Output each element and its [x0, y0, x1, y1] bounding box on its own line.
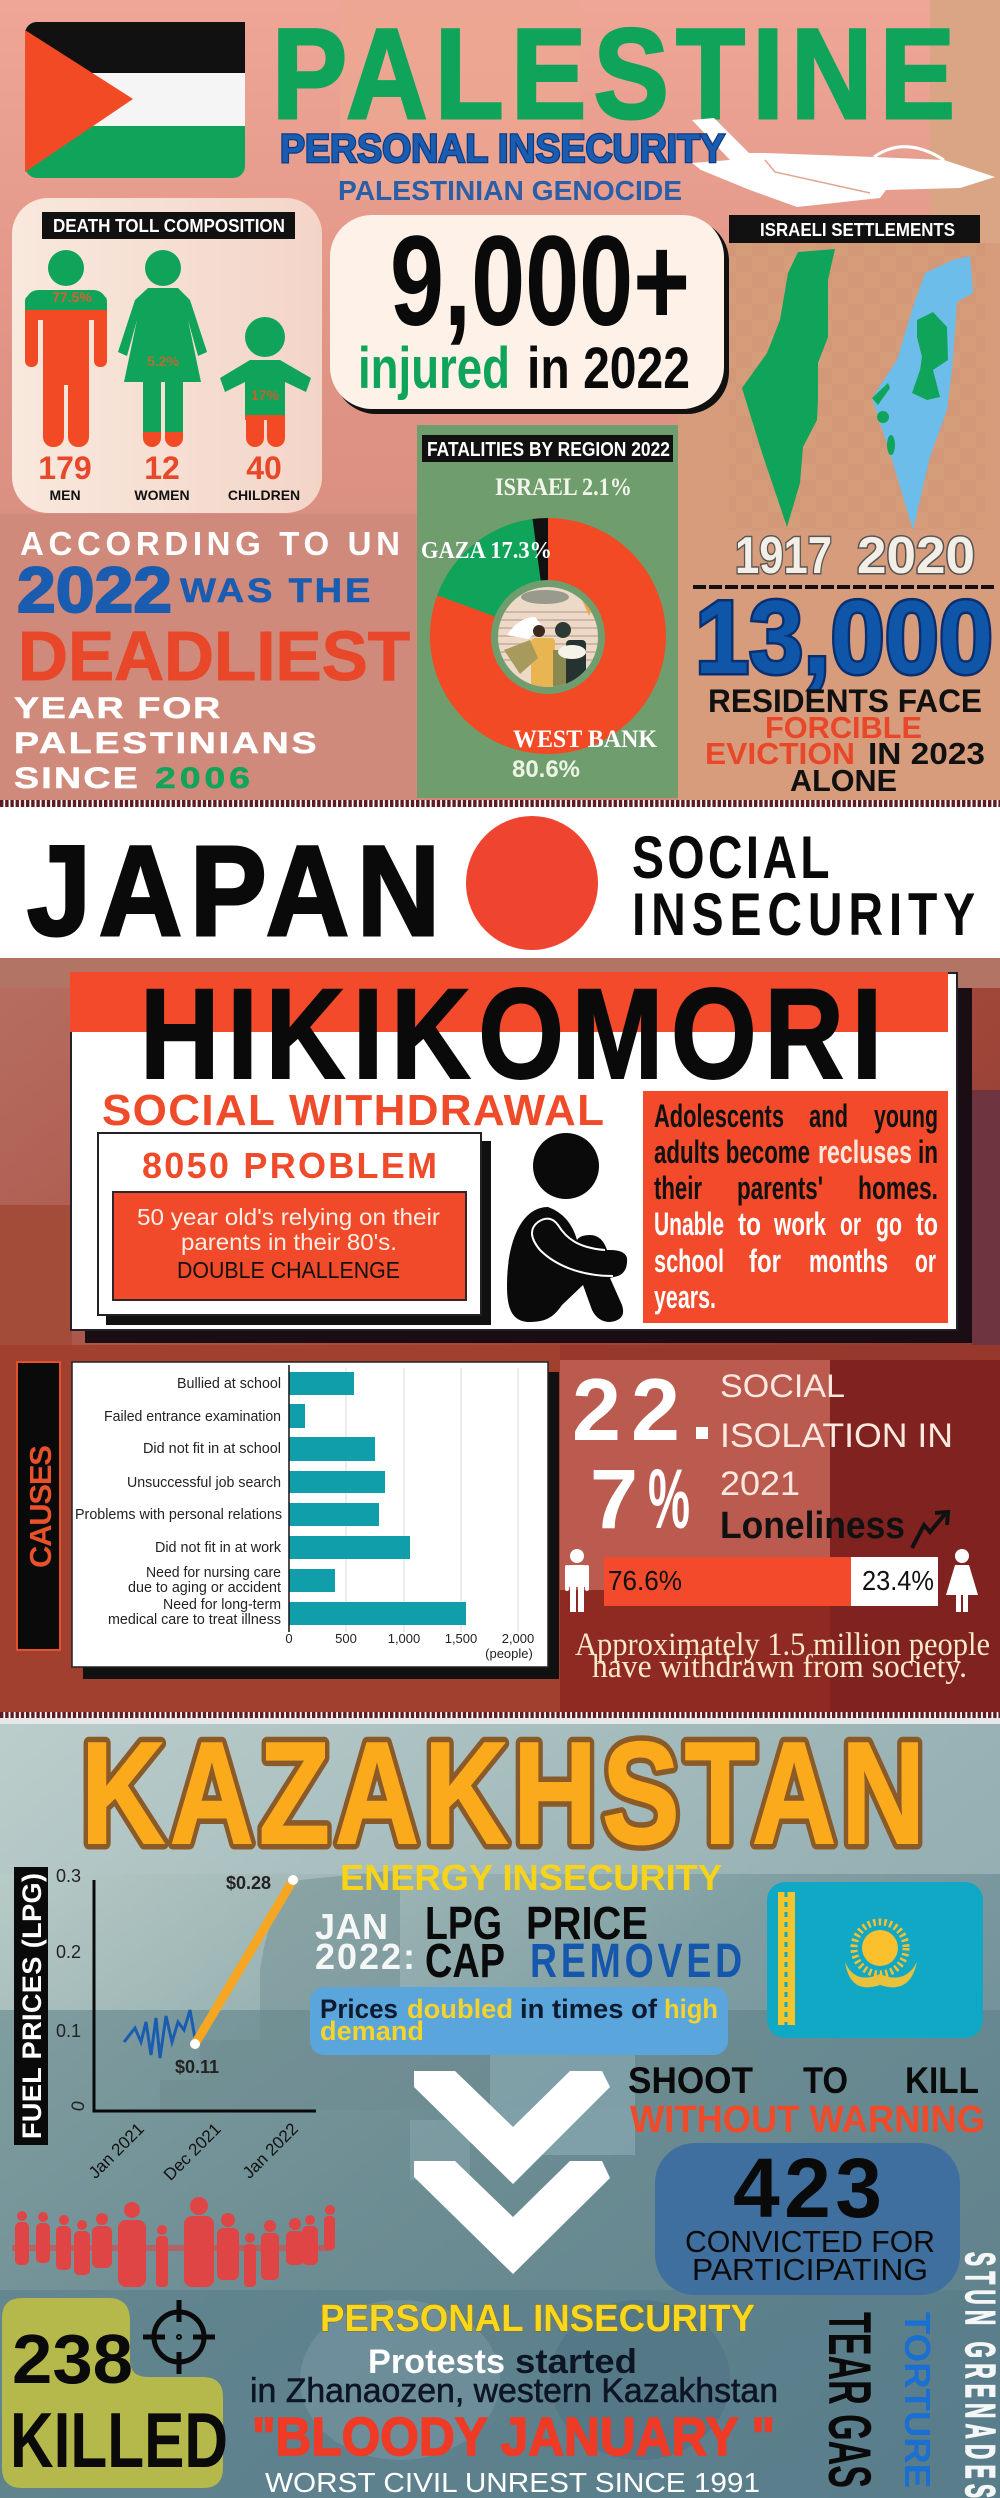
- label: years: 1917: [735, 527, 832, 585]
- bar chart: causes: Unsuccessful job search: [127, 1474, 281, 1491]
- text block: deadliest year: DEADLIEST: [18, 617, 410, 695]
- stat: 13,000 residents: RESIDENTS FACE: [708, 683, 982, 719]
- text block: personal insecurity: started: [515, 2343, 637, 2381]
- stat: social isolation: 22: [572, 1360, 680, 1459]
- text block: description: months: [809, 1243, 888, 1279]
- bar chart: causes: Did not fit in at work: [155, 1539, 281, 1556]
- text block: description: years.: [654, 1279, 716, 1315]
- label: fuel prices: FUEL PRICES (LPG): [17, 1873, 47, 2139]
- panel: 8050 problem: 8050 PROBLEM: [142, 1145, 437, 1186]
- icon: fighter jet: [692, 118, 995, 207]
- heading: social withdrawal: SOCIAL WITHDRAWAL: [102, 1086, 604, 1135]
- bar chart: causes: 0: [285, 1631, 293, 1646]
- text block: description: homes.: [858, 1170, 938, 1206]
- section: Palestine: [0, 0, 1000, 802]
- panel: fatalities by region: [417, 425, 678, 798]
- text block: description: [643, 1091, 948, 1323]
- text block: description: Adolescents: [654, 1098, 784, 1134]
- panel: 8050 problem: 50 year old's relying on their: [137, 1204, 440, 1230]
- text block: personal insecurity: Protests: [368, 2343, 505, 2381]
- title: Kazakhstan: KAZAKHSTAN: [81, 1712, 925, 1874]
- callout: prices doubled: demand: [320, 2016, 424, 2046]
- bar chart: causes: due to aging or accident: [128, 1579, 282, 1596]
- panel: fatalities by region: GAZA 17.3%: [421, 538, 552, 564]
- text block: description: recluses: [818, 1134, 912, 1170]
- callout: prices doubled: [310, 1987, 728, 2055]
- text block: description: for: [749, 1243, 781, 1279]
- caption: 1.5 million people: have withdrawn from society.: [592, 1649, 967, 1685]
- stat: 238 killed: 238: [12, 2320, 133, 2398]
- stat: 13,000 residents: ALONE: [790, 763, 897, 798]
- map: 1917: [742, 249, 835, 527]
- gender bar: [604, 1557, 938, 1606]
- text: shoot to kill: KILL: [905, 2060, 979, 2101]
- panel: death toll composition: [12, 198, 322, 513]
- bar chart: causes: [72, 1362, 559, 1679]
- callout: prices doubled: doubled: [407, 1994, 513, 2024]
- map: 2020: [872, 256, 973, 530]
- label: fatalities heading: FATALITIES BY REGION 2022: [427, 439, 670, 461]
- text block: personal insecurity: in Zhanaozen, western Kazakhstan: [250, 2372, 778, 2410]
- text block: LPG price cap removed: [315, 1897, 742, 1988]
- label: years: 2020: [857, 527, 975, 585]
- heading: energy insecurity: ENERGY INSECURITY: [340, 1857, 722, 1898]
- bar chart: causes: 1,500: [445, 1631, 477, 1646]
- flag: Kazakhstan: [767, 1882, 983, 2038]
- text block: LPG price cap removed: 2022:: [315, 1936, 415, 1977]
- section: Japan banner: [0, 807, 1000, 962]
- bar chart: causes: medical care to treat illness: [108, 1611, 281, 1628]
- stat: 238 killed: KILLED: [10, 2396, 228, 2484]
- stat: 13,000 residents: FORCIBLE: [765, 710, 922, 745]
- bar chart: causes: Need for long-term: [163, 1596, 281, 1613]
- panel: Hikikomori card: [70, 963, 972, 1343]
- stat: men: MEN: [49, 487, 81, 503]
- text block: description: their: [654, 1170, 702, 1206]
- label: causes: CAUSES: [23, 1445, 58, 1568]
- stat: 423 convicted: [655, 2141, 960, 2295]
- icon: child: 17%: [251, 387, 280, 403]
- icon: double chevron arrows: [414, 2071, 610, 2274]
- panel: fatalities by region: WEST BANK: [513, 726, 658, 753]
- text: shoot to kill: WITHOUT WARNING: [630, 2099, 985, 2141]
- section: Kazakhstan: [0, 1712, 1000, 2498]
- label: years: [735, 527, 975, 585]
- stat: social isolation: 7: [590, 1452, 638, 1546]
- icon: rising arrow: [912, 1512, 948, 1548]
- text block: deadliest year: PALESTINIANS: [14, 726, 316, 760]
- vertical text: torture: TORTURE: [897, 2312, 938, 2488]
- text block: description: school: [654, 1243, 724, 1279]
- panel: fatalities by region: 80.6%: [512, 756, 580, 783]
- bar chart: causes: 2,000: [502, 1631, 534, 1646]
- stat: men: [38, 450, 92, 503]
- line chart: fuel prices: Jan 2022: [239, 2119, 302, 2182]
- stat: children: CHILDREN: [228, 487, 300, 503]
- stat: social isolation: ISOLATION IN: [720, 1417, 953, 1455]
- text block: description: work: [773, 1206, 826, 1242]
- text block: LPG price cap removed: REMOVED: [530, 1935, 742, 1988]
- icon: crosshair: [143, 2300, 215, 2374]
- text block: description: and: [809, 1098, 848, 1134]
- stat: 13,000 residents: EVICTION: [705, 736, 855, 771]
- text block: description: or: [840, 1206, 861, 1242]
- stat: children: [228, 450, 300, 503]
- panel: fatalities by region: ISRAEL 2.1%: [495, 474, 632, 501]
- text: shoot to kill: [628, 2060, 985, 2141]
- line chart: fuel prices: $0.28: [226, 1873, 271, 1893]
- callout: prices doubled: in times of: [520, 1994, 658, 2024]
- caption: 1.5 million people: [575, 1627, 990, 1685]
- stat: men: 179: [38, 450, 92, 486]
- line chart: fuel prices: Dec 2021: [160, 2119, 225, 2184]
- text block: LPG price cap removed: JAN: [315, 1906, 388, 1947]
- stat: women: [134, 450, 190, 503]
- stat: women: 12: [144, 450, 180, 486]
- text block: description: in: [918, 1134, 938, 1170]
- text: shoot to kill: SHOOT: [628, 2060, 753, 2101]
- title: Kazakhstan: KAZAKHSTAN: [81, 1712, 925, 1874]
- stat: social isolation: 2021: [720, 1465, 800, 1503]
- text block: description: go: [876, 1206, 902, 1242]
- text block: deadliest year: ACCORDING TO UN: [20, 525, 400, 562]
- stat: 13,000 residents: [695, 580, 993, 798]
- icon: crowd silhouette: [12, 2197, 335, 2287]
- text block: deadliest year: WAS THE: [180, 571, 370, 610]
- subtitle: social insecurity: [632, 824, 975, 948]
- subtitle: social insecurity: INSECURITY: [632, 881, 975, 948]
- text block: deadliest year: 2022: [17, 554, 172, 626]
- bar chart: causes: 1,000: [388, 1631, 420, 1646]
- stat: 423 convicted: 423: [733, 2141, 882, 2235]
- stat: children: 40: [246, 450, 282, 486]
- text block: description: or: [915, 1243, 936, 1279]
- stat: women: WOMEN: [134, 487, 190, 503]
- panel: 8050 problem: parents in their 80's.: [181, 1229, 397, 1255]
- text block: personal insecurity: "BLOODY JANUARY ": [252, 2407, 775, 2467]
- bar chart: causes: 500: [335, 1631, 357, 1646]
- text block: LPG price cap removed: LPG: [425, 1897, 502, 1949]
- text block: deadliest year: SINCE: [14, 761, 138, 795]
- panel: 8050 problem: DOUBLE CHALLENGE: [177, 1257, 400, 1283]
- label: settlements heading: ISRAELI SETTLEMENTS: [760, 220, 955, 240]
- subtitle: social insecurity: SOCIAL: [632, 824, 830, 891]
- subtitle: personal insecurity: PERSONAL INSECURITY: [280, 127, 725, 171]
- gender bar: 76.6%: [608, 1565, 682, 1596]
- text block: description: young: [874, 1098, 938, 1134]
- stat: social isolation: SOCIAL: [720, 1368, 845, 1404]
- stat: 238 killed: [2, 2298, 228, 2488]
- bar chart: causes: Did not fit in at school: [143, 1440, 281, 1457]
- icon: man: [25, 250, 107, 447]
- title: Palestine: PALESTINE: [272, 2, 955, 146]
- line chart: fuel prices: 0.3: [56, 1866, 81, 1886]
- label: death toll heading: DEATH TOLL COMPOSITION: [53, 216, 285, 236]
- text block: description: to: [916, 1206, 938, 1242]
- text block: personal insecurity: PERSONAL INSECURITY: [320, 2298, 755, 2340]
- bar chart: causes: Need for nursing care: [146, 1564, 281, 1581]
- callout: injured: injured: [358, 336, 510, 401]
- stat: social isolation: [572, 1360, 953, 1547]
- icon: man: 77.5%: [52, 289, 92, 305]
- bar chart: causes: Problems with personal relations: [75, 1506, 282, 1523]
- bar chart: causes: Bullied at school: [177, 1375, 281, 1392]
- text block: personal insecurity: WORST CIVIL UNREST SINCE 1991: [265, 2467, 760, 2498]
- stat: social isolation: %: [648, 1452, 690, 1546]
- stat: 423 convicted: PARTICIPATING: [692, 2252, 928, 2287]
- text block: deadliest year: 2006: [155, 761, 250, 795]
- callout: prices doubled: high: [664, 1994, 718, 2024]
- gender bar: 23.4%: [862, 1565, 934, 1596]
- line chart: fuel prices: Jan 2021: [85, 2119, 148, 2182]
- heading: Hikikomori: HIKIKOMORI: [140, 963, 882, 1106]
- line chart: fuel prices: [14, 1866, 316, 2184]
- flag: Palestine: [25, 22, 245, 178]
- bar chart: causes: (people): [485, 1646, 533, 1661]
- icon: woman: 5.2%: [147, 353, 180, 369]
- callout: injured: 9,000+: [390, 210, 690, 353]
- icon: rising sun: [466, 816, 598, 950]
- icon: seated person: [507, 1133, 627, 1322]
- callout: prices doubled: Prices: [320, 1994, 398, 2024]
- text: shoot to kill: TO: [803, 2060, 848, 2101]
- text block: description: parents': [737, 1170, 823, 1206]
- stat: social isolation: Loneliness: [720, 1505, 905, 1547]
- icon: child: [220, 317, 311, 447]
- bar chart: causes: Failed entrance examination: [104, 1408, 281, 1425]
- text block: description: adults become: [654, 1134, 810, 1170]
- donut chart: [430, 518, 666, 754]
- subtitle: Palestinian genocide: PALESTINIAN GENOCIDE: [338, 175, 682, 206]
- callout: injured: [330, 210, 729, 414]
- label: causes: [17, 1362, 60, 1650]
- title: Japan: JAPAN: [27, 819, 440, 962]
- text block: LPG price cap removed: CAP: [425, 1935, 505, 1988]
- text block: LPG price cap removed: PRICE: [526, 1897, 648, 1949]
- icon: man figure: [565, 1549, 589, 1612]
- stat: 423 convicted: CONVICTED FOR: [685, 2224, 935, 2259]
- callout: injured: in 2022: [527, 336, 690, 401]
- line chart: fuel prices: 0.2: [56, 1942, 81, 1962]
- stat: 13,000 residents: IN 2023: [868, 736, 985, 771]
- text block: deadliest year: [14, 525, 410, 795]
- text block: deadliest year: YEAR FOR: [14, 691, 220, 725]
- illustration: family: [498, 590, 598, 687]
- text block: description: Unable: [654, 1206, 724, 1242]
- text block: personal insecurity: [250, 2298, 778, 2498]
- line chart: fuel prices: $0.11: [175, 2057, 219, 2077]
- icon: woman figure: [946, 1549, 978, 1612]
- section: Hikikomori: [0, 958, 1000, 1712]
- line chart: fuel prices: 0: [67, 2099, 89, 2113]
- label: settlements heading: [729, 215, 980, 243]
- panel: Israeli settlements: [729, 215, 985, 585]
- line chart: fuel prices: 0.1: [56, 2021, 81, 2041]
- icon: woman: [118, 250, 207, 447]
- text block: description: to: [738, 1206, 761, 1242]
- panel: 8050 problem: [98, 1133, 491, 1325]
